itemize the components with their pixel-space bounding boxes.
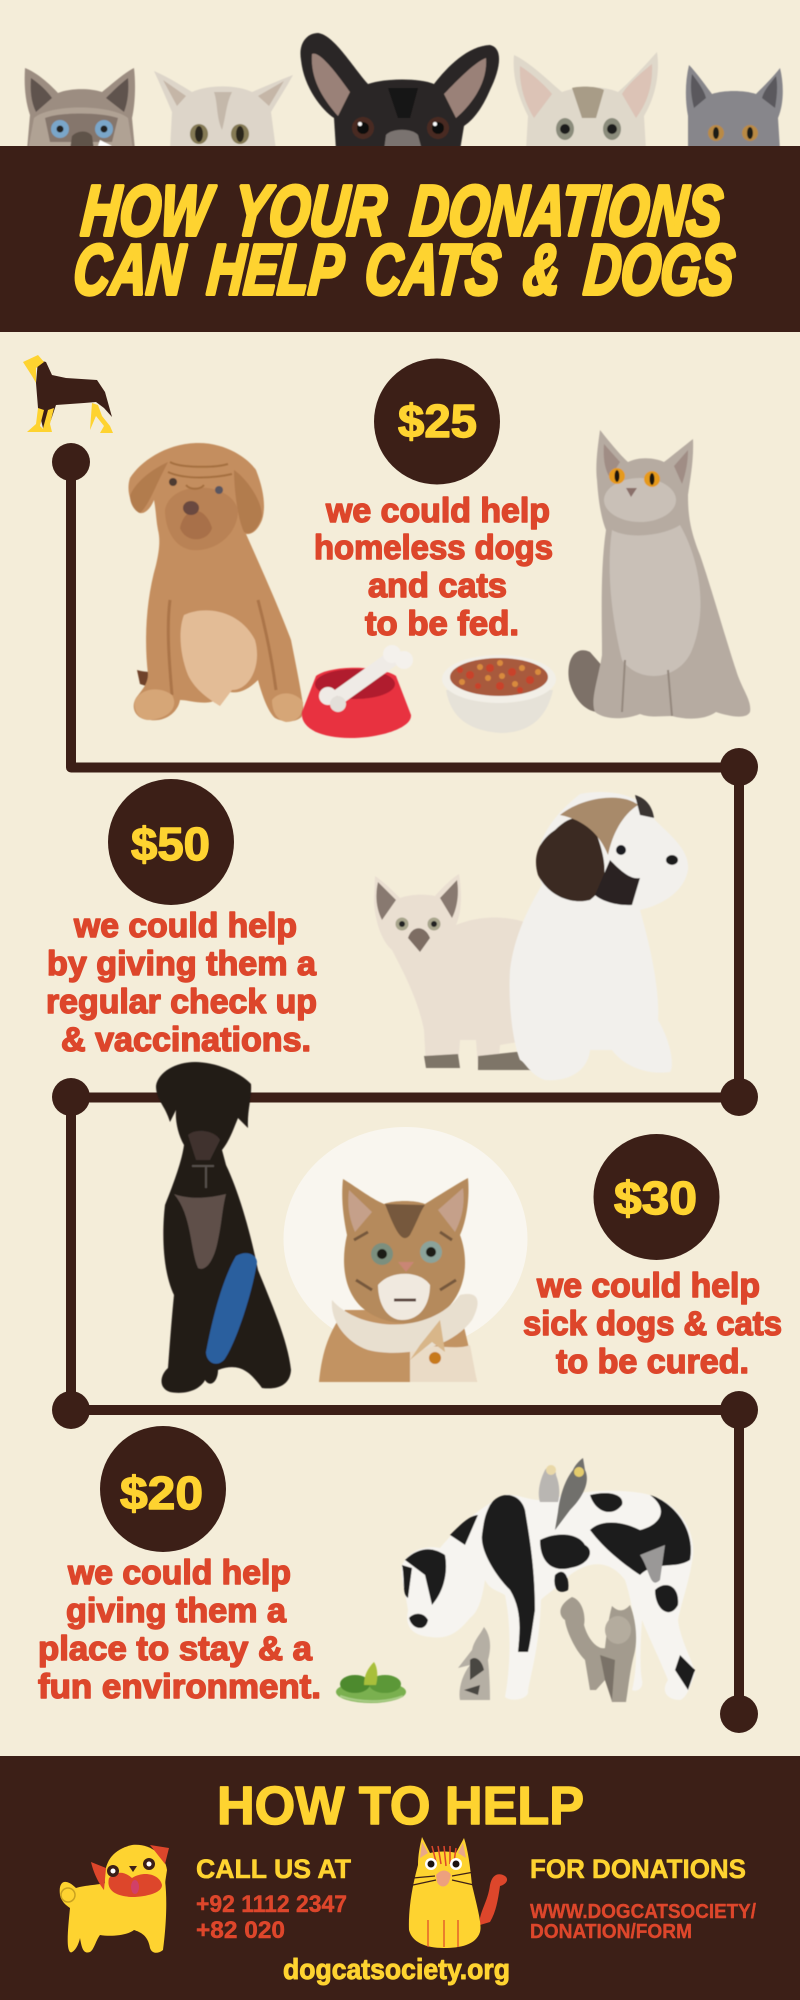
photo: siamese kitten <box>374 874 535 1070</box>
panel: $20 shelter <box>38 1426 695 1706</box>
photo: siamese cat <box>25 68 135 150</box>
panel: $25 fed <box>128 358 750 738</box>
text: $30 description: sick dogs & cats <box>523 1305 782 1343</box>
photo: cat with cone <box>284 1127 528 1382</box>
text: $50 description: by giving them a <box>47 945 317 983</box>
icon: red bowl with bone <box>302 645 413 738</box>
text: for donations: WWW.DOGCATSOCIETY/ <box>530 1901 756 1923</box>
header animals peeking <box>25 33 783 150</box>
text: for donations <box>530 1854 756 1943</box>
text: website: dogcatsociety.org <box>283 1954 510 1986</box>
icon: cartoon cat <box>409 1837 507 1948</box>
text: $50 description <box>46 907 317 1059</box>
photo: great dane <box>402 1491 695 1700</box>
text: $20 description: place to stay & a <box>38 1630 313 1668</box>
text: $25 description: to be fed. <box>365 605 519 643</box>
panel: $30 cure <box>156 1062 782 1393</box>
badge $25: $25 <box>398 395 477 447</box>
text: call us at: +92 1112 2347 <box>196 1891 347 1918</box>
photo: shih tzu puppy <box>509 792 688 1080</box>
text: call us at: +82 020 <box>196 1917 285 1944</box>
icon: kibble bowl <box>442 655 556 733</box>
badge $20 <box>100 1426 226 1552</box>
photo: grey british cat <box>568 430 750 719</box>
text: for donations: FOR DONATIONS <box>530 1854 746 1884</box>
cone collar disc <box>284 1127 528 1351</box>
text: $20 description: fun environment. <box>38 1668 321 1706</box>
icon: green snake <box>336 1662 406 1703</box>
photo: grey cat <box>686 65 783 150</box>
text: $50 description: we could help <box>73 907 297 945</box>
text: $30 description <box>523 1267 782 1381</box>
badge $50 <box>108 779 234 905</box>
title band <box>0 146 800 332</box>
text: $25 description: we could help <box>325 492 550 530</box>
text: for donations: DONATION/FORM <box>530 1921 692 1943</box>
text: call us at <box>196 1854 351 1944</box>
text: $20 description <box>38 1554 321 1706</box>
text: $50 description: & vaccinations. <box>61 1021 311 1059</box>
icon: rottweiler silhouette <box>23 355 113 433</box>
text: $25 description: homeless dogs <box>314 529 553 567</box>
text: $30 description: to be cured. <box>556 1343 749 1381</box>
text: $25 description: and cats <box>368 567 507 605</box>
text: $30 description: we could help <box>536 1267 760 1305</box>
panel: $50 check up <box>46 779 688 1080</box>
text: call us at: CALL US AT <box>196 1854 351 1884</box>
photo: pale tabby cat <box>154 71 293 150</box>
photo: small tabby kitten <box>458 1627 490 1700</box>
text: $20 description: we could help <box>67 1554 291 1592</box>
badge $25 <box>374 358 500 484</box>
photo: dog with blue cast <box>156 1062 291 1393</box>
photo: french bulldog <box>300 33 499 150</box>
footer panel: how to help <box>0 1756 800 2000</box>
icon: pug <box>60 1845 169 1953</box>
photo: cream kitten <box>514 52 658 150</box>
text: $25 description <box>314 492 553 643</box>
badge $50: $50 <box>131 818 210 870</box>
timeline path <box>52 443 758 1733</box>
photo: cockatiels <box>539 1458 587 1530</box>
badge $30: $30 <box>614 1172 697 1224</box>
photo: bordeaux puppy <box>128 443 304 722</box>
text: $20 description: giving them a <box>66 1592 287 1630</box>
text: $50 description: regular check up <box>46 983 317 1021</box>
badge $30 <box>594 1134 720 1260</box>
photo: fluffy grey cat <box>560 1597 636 1702</box>
heading: how to help: HOW TO HELP <box>217 1776 584 1836</box>
badge $20: $20 <box>120 1467 203 1519</box>
